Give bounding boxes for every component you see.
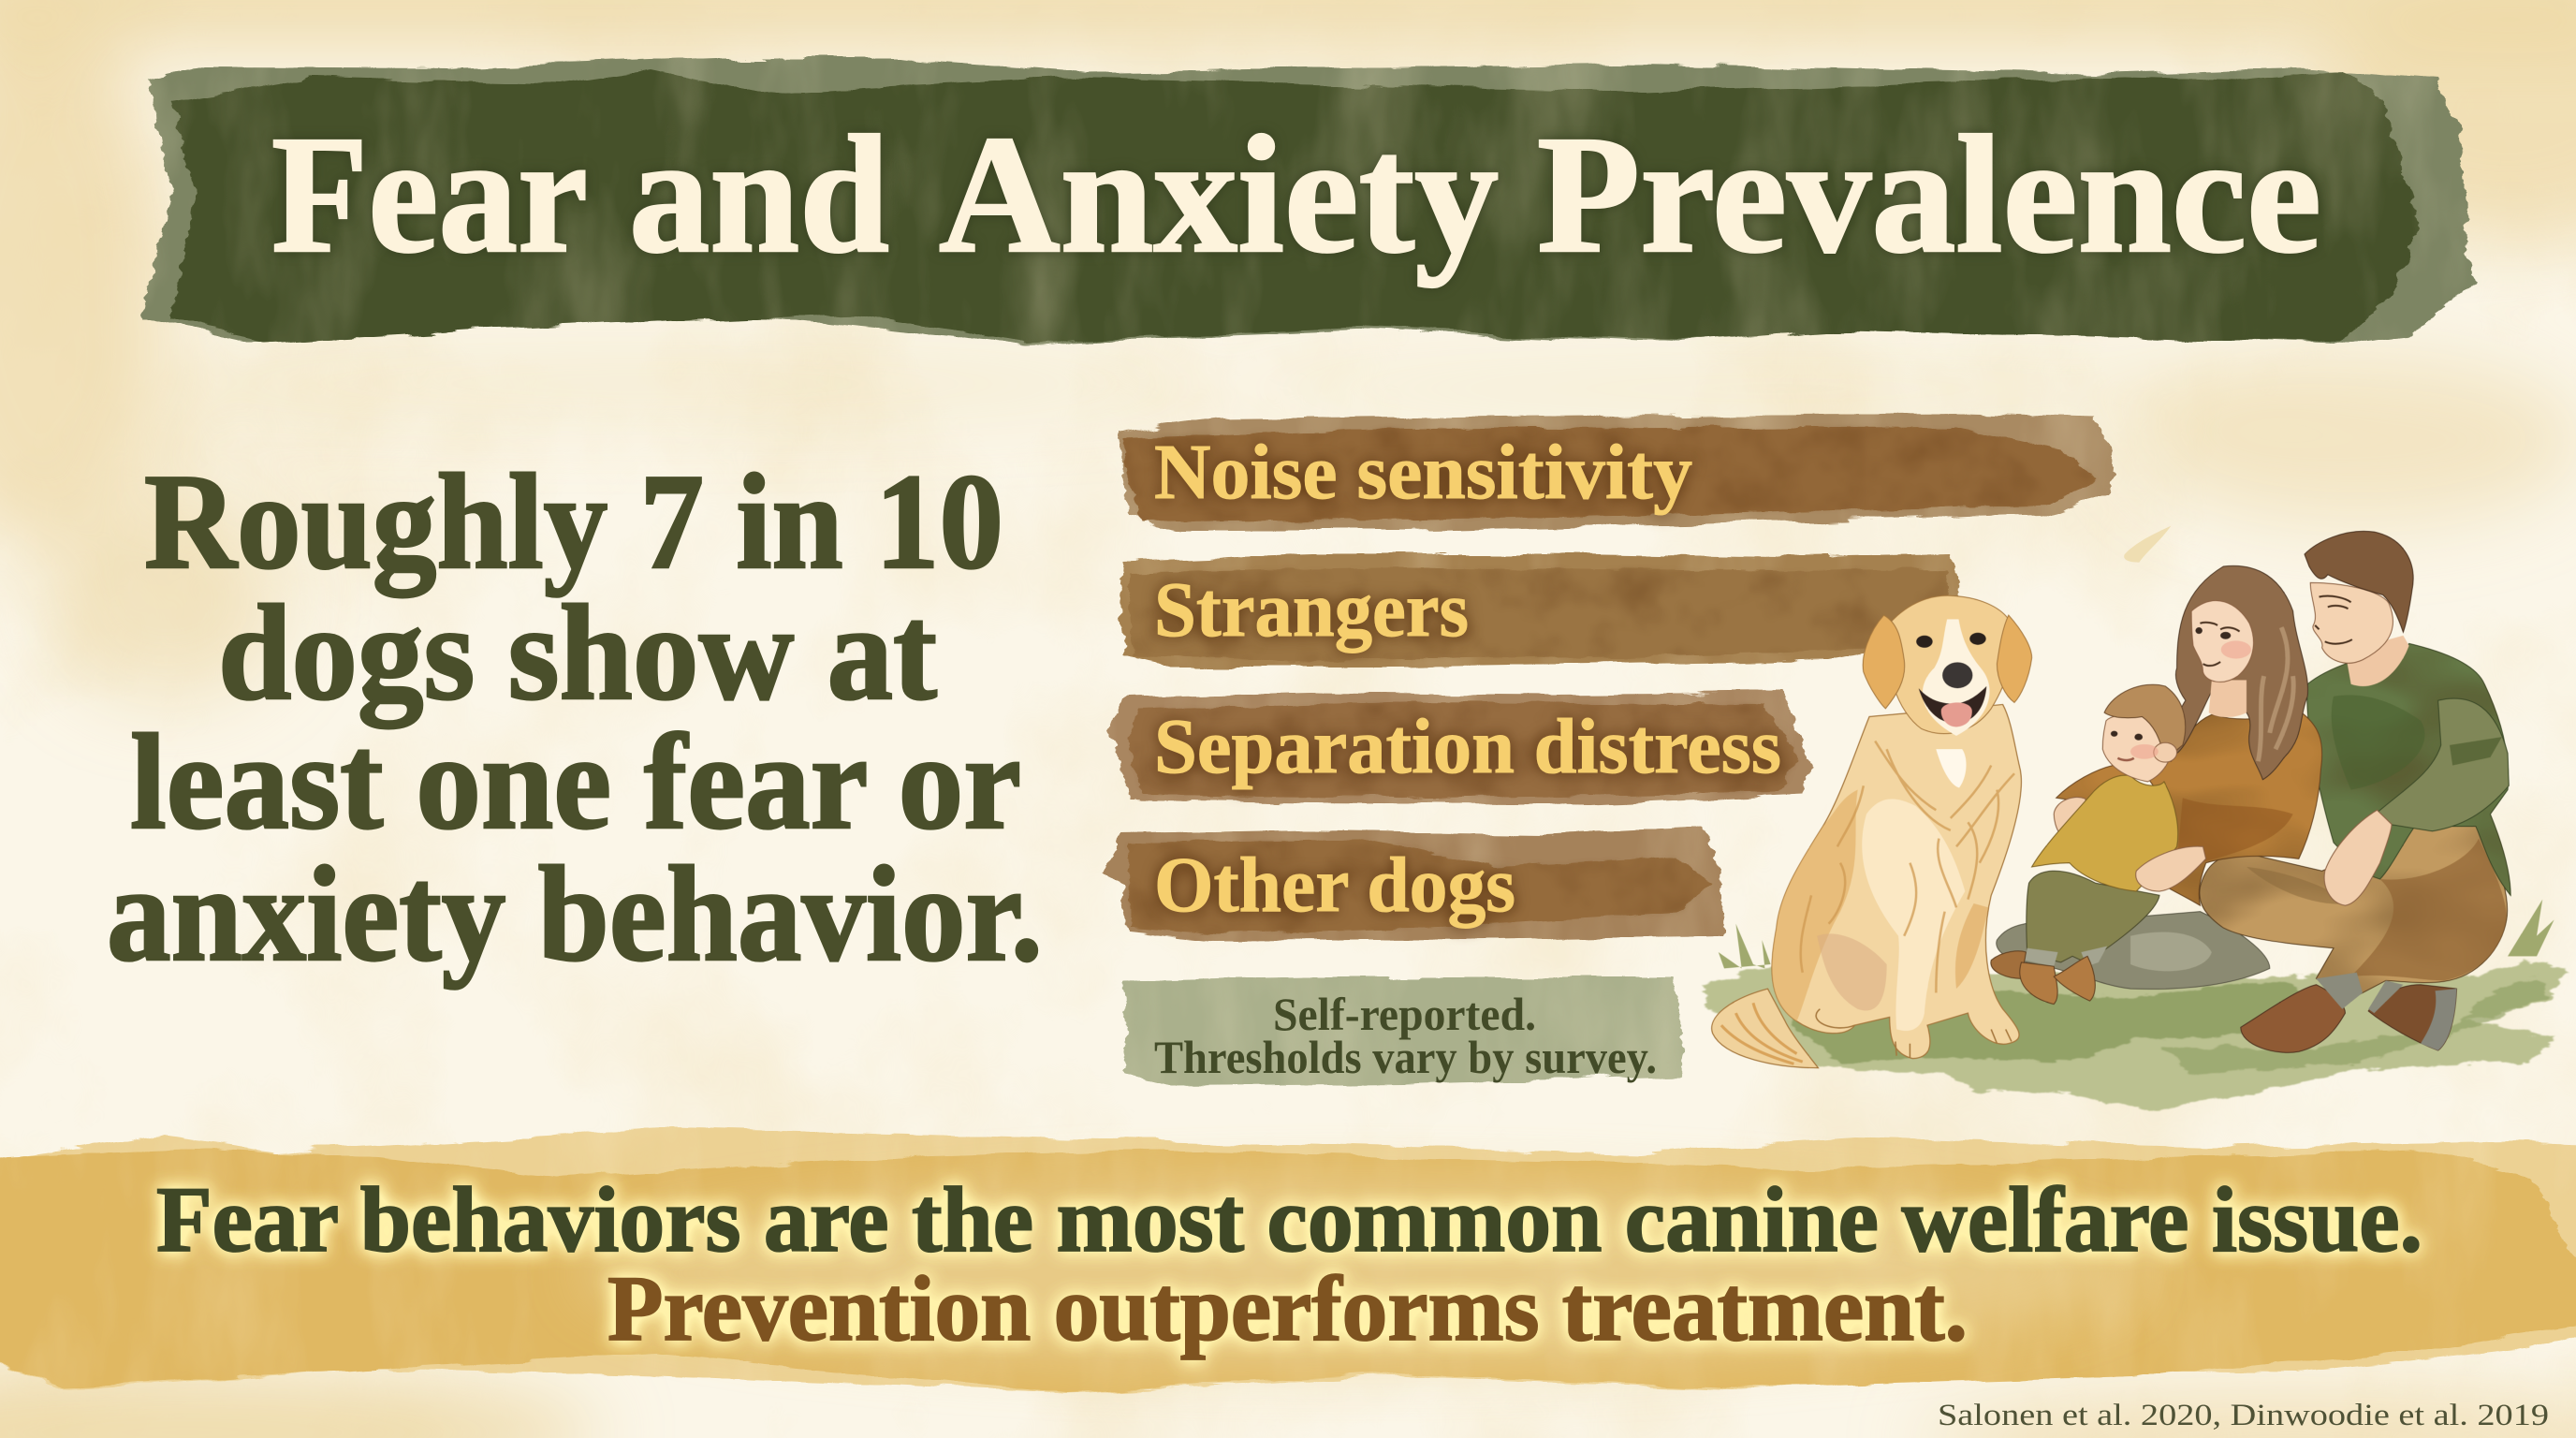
banner wash outer (140, 59, 2476, 345)
citation: Salonen et al. 2020, Dinwoodie et al. 2019 (1938, 1399, 2549, 1432)
band wash inner (0, 1149, 2576, 1392)
dog body (1772, 705, 2021, 1059)
key statistic text: anxiety behavior. (107, 838, 1043, 990)
dog mouth (1919, 686, 1986, 723)
title text: Fear (271, 101, 588, 287)
title text: Prevalence (1537, 101, 2321, 287)
dog (1712, 595, 2032, 1068)
trigger bar: separation distress (1106, 693, 1811, 805)
dog tail (1712, 989, 1818, 1068)
man (2200, 531, 2510, 1052)
trigger bar: noise sensitivity (1119, 414, 2114, 530)
takeaway line one: Fear behaviors are the most common canine welfare issue. (156, 1167, 2422, 1271)
man trousers (2200, 827, 2507, 999)
band centre lightening (580, 1180, 2134, 1367)
child hand (2136, 846, 2206, 891)
woman hair (2175, 565, 2308, 780)
label: separation distress: Separation distress (1154, 703, 1781, 790)
child head (2102, 714, 2173, 782)
title text: Anxiety (939, 101, 1499, 287)
label: noise sensitivity: Noise sensitivity (1154, 429, 1692, 516)
note: survey caveat (1123, 977, 1681, 1086)
note text: Thresholds vary by survey. (1154, 1031, 1657, 1083)
grass (1701, 900, 2566, 1110)
key statistic text: Roughly 7 in 10 (144, 446, 1003, 597)
man sleeve (2376, 698, 2509, 831)
label: other dogs: Other dogs (1154, 842, 1515, 929)
trigger bar: strangers (1120, 554, 1958, 667)
man sweater (2307, 643, 2510, 895)
man hand (2324, 810, 2392, 905)
man shoes (2241, 985, 2345, 1052)
title text: and (629, 101, 889, 287)
dog head (1887, 595, 2013, 734)
woman sweater (2056, 711, 2322, 905)
title text (271, 101, 2321, 287)
man neck and face (2345, 636, 2409, 686)
woman hand on child (2054, 798, 2089, 842)
man facial features (2315, 596, 2352, 644)
banner wash inner (171, 68, 2420, 343)
child (1991, 684, 2206, 1005)
child shoes (1991, 951, 2026, 978)
background splash (2124, 526, 2171, 563)
note text: Self-reported. (1273, 988, 1536, 1040)
illustration: dog and family (1701, 526, 2566, 1110)
rock (1997, 912, 2270, 990)
label: strangers: Strangers (1154, 566, 1469, 653)
man hair (2305, 531, 2413, 632)
child sweater (2032, 775, 2178, 891)
child trousers (2027, 871, 2159, 964)
dog eyes and nose (1916, 636, 1933, 648)
trigger bar: other dogs (1103, 828, 1724, 941)
title banner (140, 59, 2476, 345)
takeaway line two: Prevention outperforms treatment. (607, 1256, 1968, 1360)
key statistic text: least one fear or (130, 706, 1021, 858)
woman (2054, 565, 2322, 905)
key statistic text (107, 446, 1043, 990)
note text (1154, 988, 1657, 1083)
dog chest and shading (1772, 790, 1858, 1021)
bottom takeaway band (0, 1128, 2576, 1393)
key statistic text: dogs show at (218, 577, 937, 728)
band wash outer (0, 1128, 2576, 1393)
woman face (2209, 680, 2247, 717)
